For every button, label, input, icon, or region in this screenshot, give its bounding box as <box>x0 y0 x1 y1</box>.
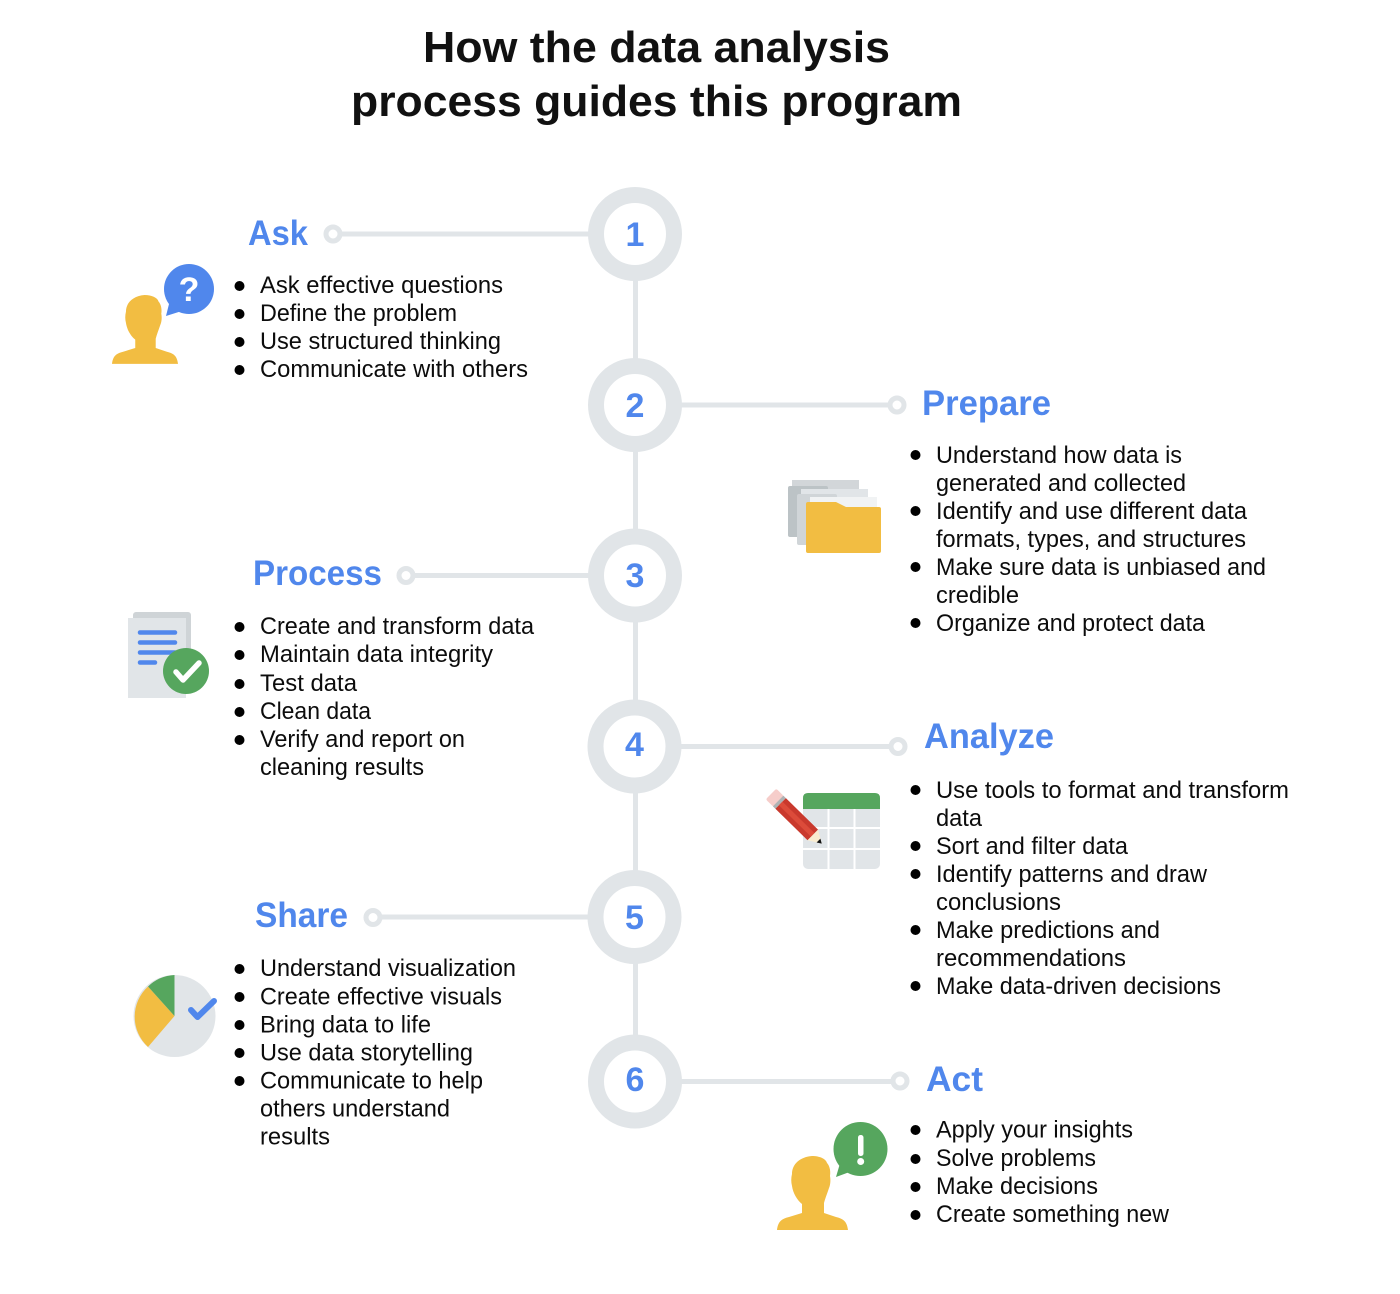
list: prepare: credible <box>936 582 1019 609</box>
title: process guides this program <box>351 77 962 126</box>
heading: ask: Ask <box>248 214 308 253</box>
list: process: Clean data <box>260 698 372 725</box>
list: analyze: Sort and filter data <box>936 833 1129 860</box>
list: share <box>234 955 516 1150</box>
step 3 node: 3 <box>626 557 644 595</box>
icon: person asking a question: ? <box>179 271 199 309</box>
heading: analyze: Analyze <box>924 717 1054 756</box>
step 2 node: 2 <box>626 387 644 425</box>
step 4 node: 4 <box>625 726 644 764</box>
list: analyze: Use tools to format and transform <box>936 777 1289 804</box>
heading: share: Share <box>255 896 348 935</box>
connector: ask <box>326 227 592 241</box>
list: prepare: Organize and protect data <box>936 610 1206 637</box>
step 5 node: 5 <box>625 899 644 937</box>
heading: act: Act <box>926 1060 983 1099</box>
list: process: Maintain data integrity <box>260 641 493 668</box>
list: analyze: conclusions <box>936 889 1061 916</box>
panel: share <box>134 896 592 1150</box>
list: prepare: Understand how data is <box>936 442 1182 469</box>
panel: ask <box>112 214 592 383</box>
list: analyze: Make predictions and <box>936 917 1160 944</box>
heading: prepare: Prepare <box>922 384 1051 423</box>
icon: person asking a question <box>112 264 214 364</box>
list: analyze: Make data-driven decisions <box>936 973 1221 1000</box>
list: process: Create and transform data <box>260 613 535 640</box>
icon: person with exclamation <box>777 1122 888 1230</box>
connector: analyze <box>678 740 905 754</box>
list: process: Test data <box>260 670 358 697</box>
step 1 node <box>596 195 674 273</box>
list: act <box>910 1116 1170 1228</box>
list: share: Understand visualization <box>260 955 516 982</box>
icon: folders <box>788 480 881 553</box>
list: ask: Use structured thinking <box>260 328 501 355</box>
list: analyze <box>910 777 1289 1000</box>
list: act: Solve problems <box>936 1145 1096 1172</box>
list: prepare: formats, types, and structures <box>936 526 1246 553</box>
list: analyze: data <box>936 805 983 832</box>
list: ask: Communicate with others <box>260 356 528 383</box>
connector: process <box>399 568 592 582</box>
icon: spreadsheet and pencil <box>766 789 880 869</box>
step 2 node <box>596 366 674 444</box>
icon: pie chart <box>134 975 216 1057</box>
step 1 node: 1 <box>626 216 644 254</box>
list: ask: Ask effective questions <box>260 272 503 299</box>
title <box>351 23 962 126</box>
panel: process <box>128 554 592 781</box>
heading: process: Process <box>253 554 382 593</box>
list: share: others understand <box>260 1096 450 1122</box>
connector: share <box>366 910 592 924</box>
list: ask: Define the problem <box>260 300 457 327</box>
list: analyze: Identify patterns and draw <box>936 861 1208 888</box>
list: share: Use data storytelling <box>260 1040 473 1066</box>
list: share: Bring data to life <box>260 1012 431 1038</box>
list: process: Verify and report on <box>260 726 465 753</box>
panel: act <box>678 1060 1170 1230</box>
list: act: Apply your insights <box>936 1116 1133 1144</box>
list: share: results <box>260 1124 330 1150</box>
title: How the data analysis <box>423 23 890 72</box>
list: analyze: recommendations <box>936 945 1126 972</box>
panel: analyze <box>678 717 1289 1000</box>
list: process <box>234 613 535 781</box>
list: act: Create something new <box>936 1201 1170 1228</box>
timeline spine <box>596 195 674 1120</box>
list: act: Make decisions <box>936 1173 1098 1200</box>
icon: checked document <box>128 612 209 698</box>
list: process: cleaning results <box>260 754 424 781</box>
panel: prepare <box>678 384 1266 637</box>
step 4 node <box>596 708 674 786</box>
connector: act <box>678 1074 907 1088</box>
step 5 node <box>596 878 674 956</box>
step 6 node: 6 <box>626 1061 644 1099</box>
list: prepare: Identify and use different data <box>936 498 1248 525</box>
connector: prepare <box>678 398 904 412</box>
list: share: Create effective visuals <box>260 984 502 1010</box>
step 6 node <box>596 1042 674 1120</box>
list: share: Communicate to help <box>260 1068 483 1094</box>
list: ask <box>234 272 528 383</box>
list: prepare: generated and collected <box>936 470 1186 497</box>
list: prepare: Make sure data is unbiased and <box>936 554 1266 581</box>
step 3 node <box>596 536 674 614</box>
list: prepare <box>910 442 1266 637</box>
